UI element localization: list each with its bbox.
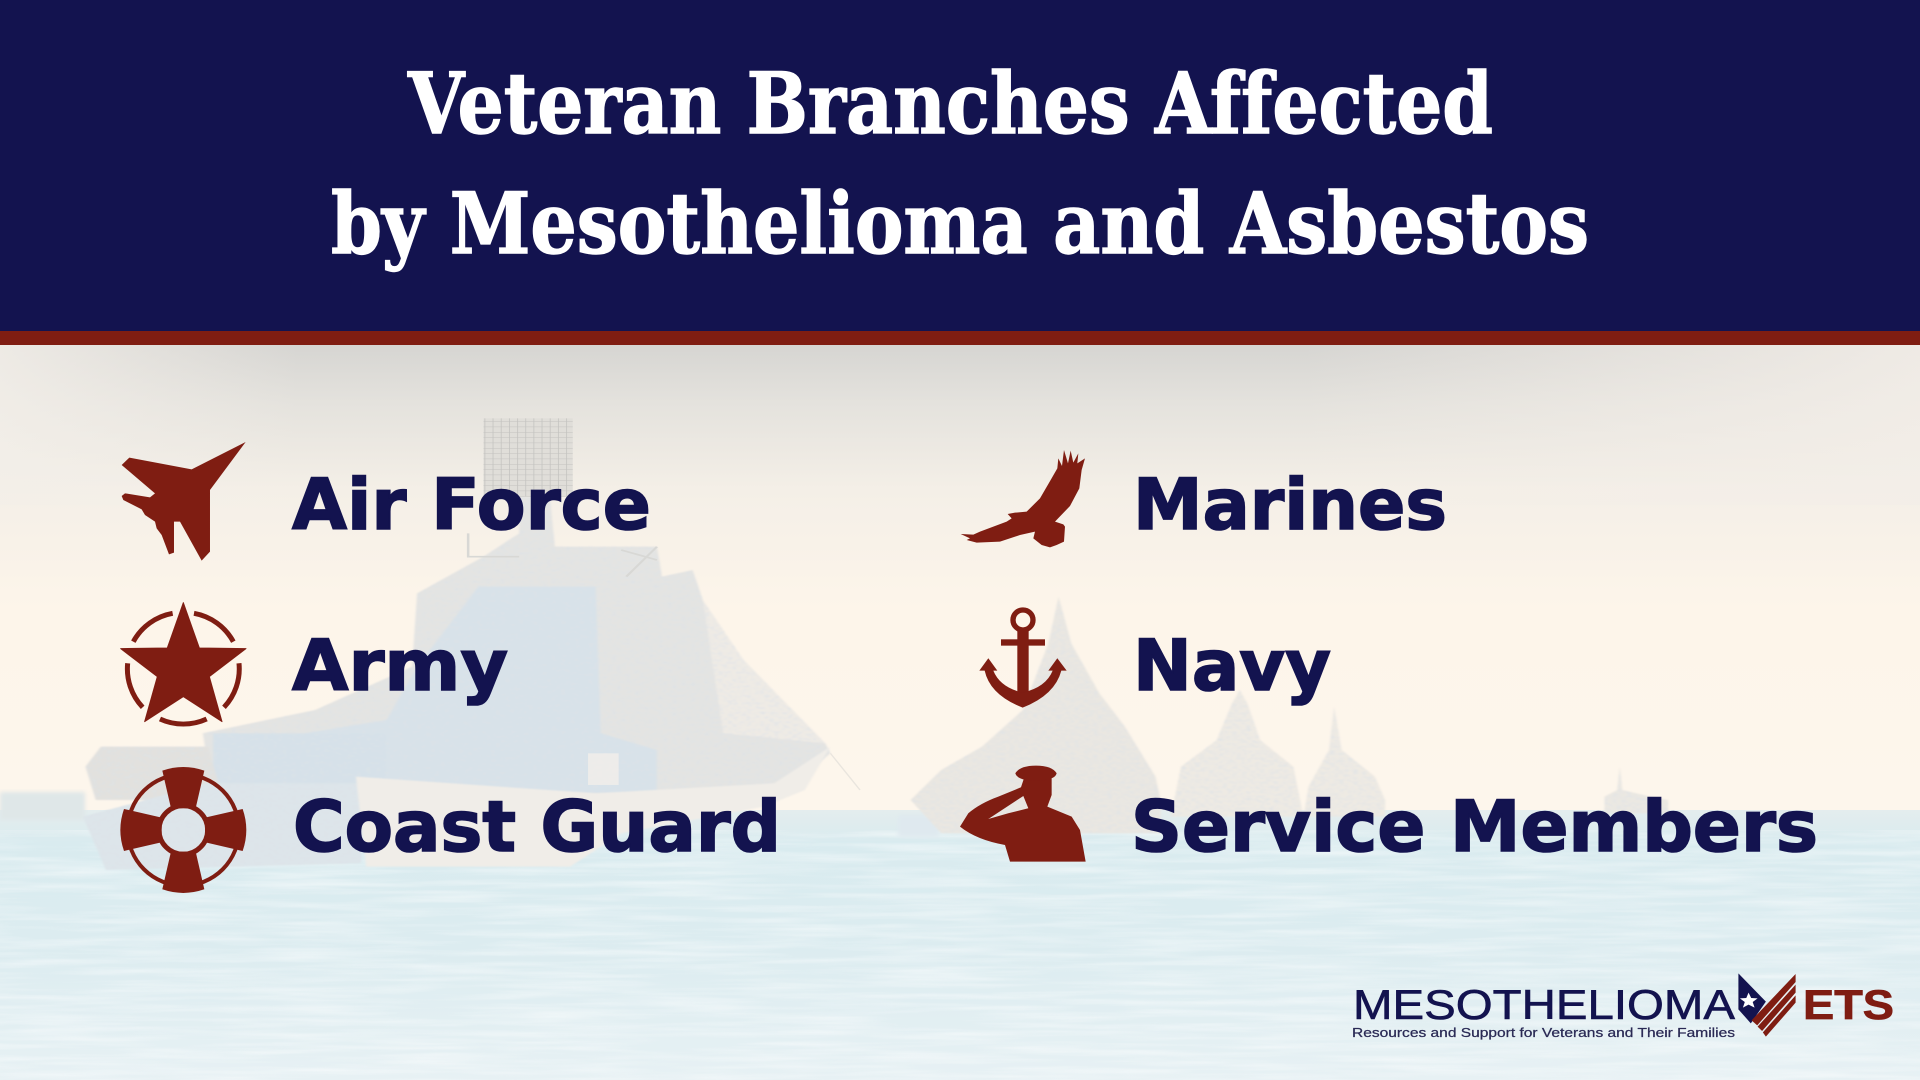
title: by Mesothelioma and Asbestos [331, 174, 1589, 273]
background: naval ships at sea [0, 345, 1920, 1080]
logo ETS: ETS [1803, 981, 1894, 1028]
icon: life ring [120, 767, 246, 893]
branch: Service Members [960, 766, 1818, 868]
title: Veteran Branches Affected [407, 54, 1493, 153]
branch: Marines [961, 450, 1447, 547]
icon: fighter jet [122, 442, 246, 561]
label: Navy: Navy [1133, 625, 1331, 707]
label: Marines: Marines [1133, 464, 1447, 546]
label: Army: Army [292, 625, 508, 707]
logo wordmark: MESOTHELIOMA [1353, 981, 1735, 1028]
icon: eagle [961, 450, 1085, 547]
icon: star in ring [121, 603, 246, 724]
header accent rule [0, 331, 1920, 345]
title [331, 54, 1589, 273]
branch: Navy [979, 610, 1331, 708]
label: Air Force: Air Force [292, 464, 651, 546]
branch: Army [121, 603, 508, 724]
logo: Mesothelioma Vets [1352, 973, 1894, 1040]
branch: Coast Guard [120, 767, 781, 893]
icon: saluting soldier [960, 766, 1086, 862]
header band [0, 0, 1920, 331]
branch: Air Force [122, 442, 651, 561]
logo chevron mark [1738, 973, 1796, 1037]
label: Service Members: Service Members [1131, 786, 1818, 868]
logo tagline: Resources and Support for Veterans and Their Families [1352, 1025, 1736, 1040]
icon: anchor [979, 610, 1067, 708]
label: Coast Guard: Coast Guard [293, 786, 781, 868]
